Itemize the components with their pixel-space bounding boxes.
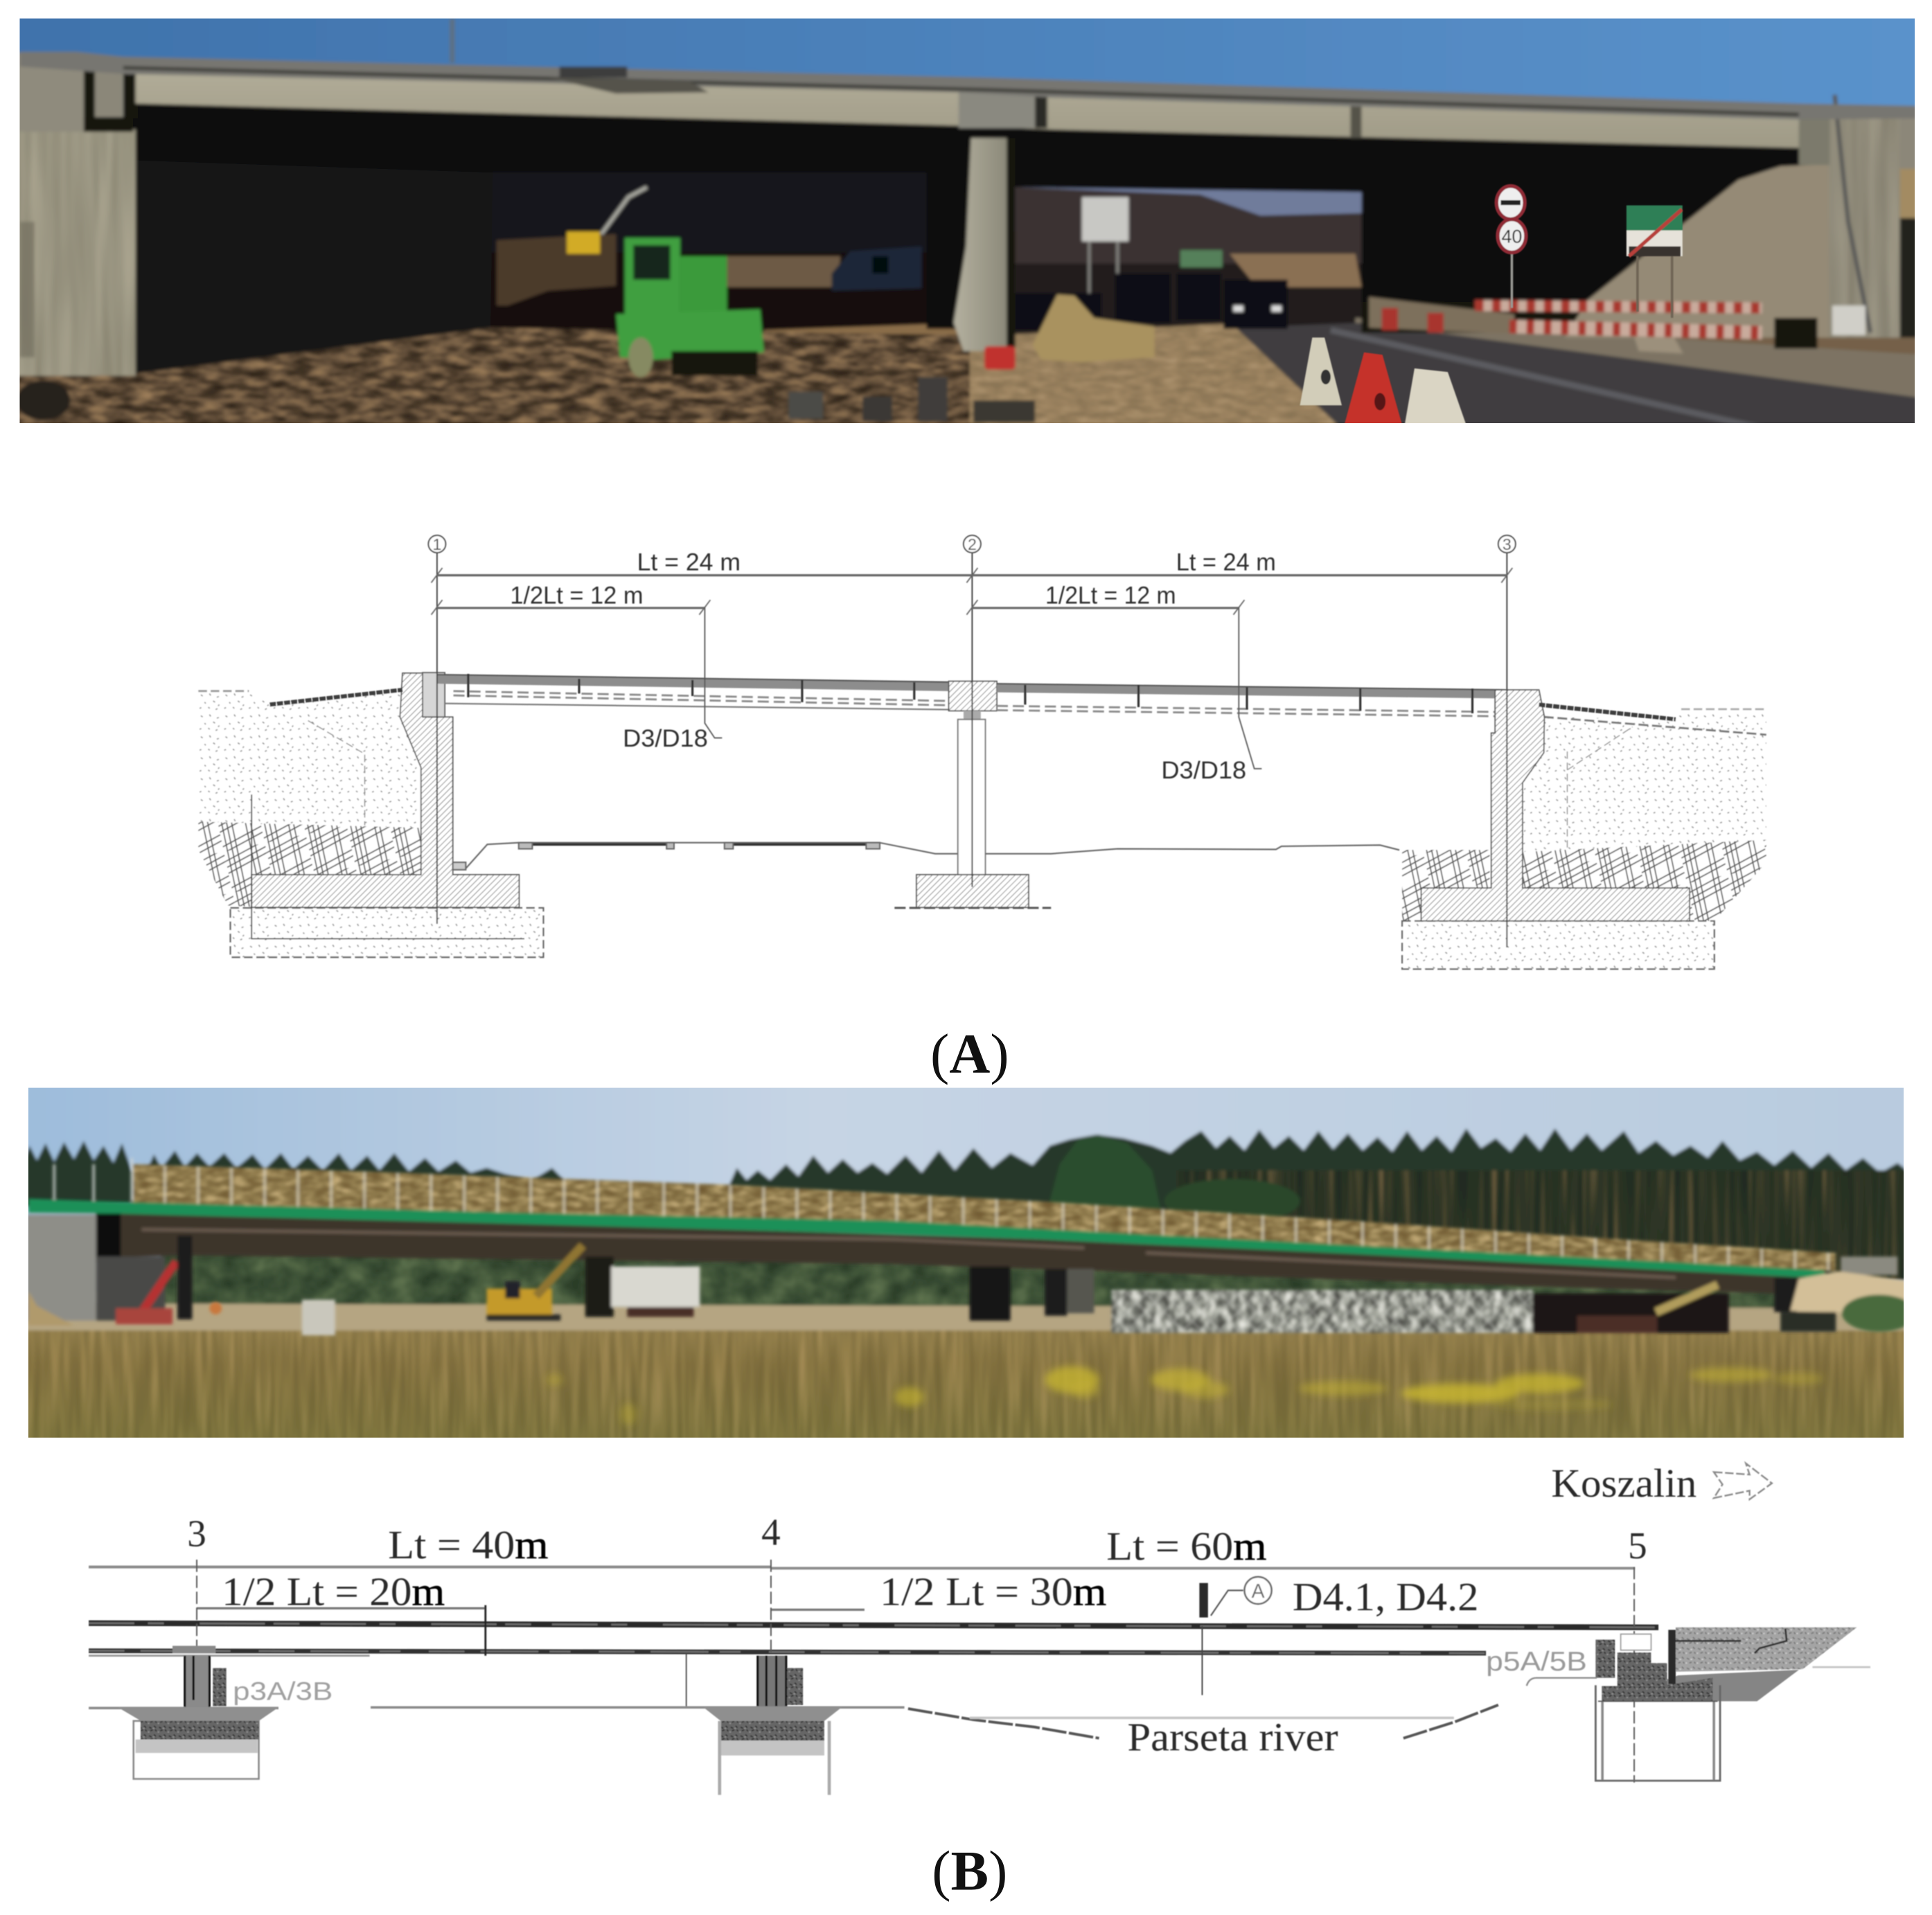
excavator <box>487 1245 583 1321</box>
dark underline of barrier <box>123 68 1799 114</box>
small red cone <box>984 346 1016 370</box>
central pier column <box>927 138 1016 351</box>
opening background right <box>1011 182 1374 335</box>
label p3A/3B: p3A/3B <box>233 1677 333 1706</box>
dimension label: 1/2 Lt = 30m: 1/2 Lt = 30 m <box>880 1569 1106 1614</box>
underside of deck <box>123 101 1805 192</box>
half span dimension lines <box>197 1605 865 1656</box>
round tree <box>1045 1134 1164 1226</box>
sensor marker: A <box>1252 1580 1265 1603</box>
sensor leader left <box>704 607 722 738</box>
left abutment <box>22 1213 165 1326</box>
abutment 5 <box>1527 1628 1870 1701</box>
red telehandler <box>116 1236 222 1324</box>
white small machines <box>302 1300 335 1335</box>
left soil crosshatch <box>198 821 421 907</box>
left abutment shaded wall <box>130 145 493 375</box>
van <box>832 247 921 291</box>
excavator <box>567 187 647 253</box>
background trees under deck <box>160 1250 1799 1312</box>
pylon <box>450 19 454 63</box>
right lean concrete <box>1402 921 1714 969</box>
dimension label: half span 1: 1/2Lt = 12 m <box>510 582 643 609</box>
rubble <box>16 377 1035 422</box>
pier 3 <box>172 1646 227 1710</box>
dimension label: Lt = 60m: Lt = 60 m <box>1106 1524 1267 1569</box>
vertical support line <box>686 1653 687 1707</box>
left reference rule <box>251 794 524 938</box>
dimension label: 1/2 Lt = 20m: 1/2 Lt = 20 m <box>222 1569 445 1614</box>
left embankment fill <box>198 691 421 828</box>
green deck edge <box>28 1199 1829 1279</box>
elevation drawing of bridge A <box>198 535 1766 969</box>
axis 3 <box>1498 535 1516 947</box>
direction label: Koszalin <box>1551 1461 1696 1506</box>
river banks and water line <box>908 1705 1498 1738</box>
dimension label: span 2: Lt = 24 m <box>1176 549 1276 576</box>
ground line left <box>89 1707 905 1709</box>
opening background left <box>488 169 957 336</box>
trunks <box>1177 1170 1916 1281</box>
green direction sign <box>1627 206 1683 318</box>
ground left of pillar <box>12 328 973 425</box>
speed limit signs: 40 <box>1502 226 1522 247</box>
traffic cones <box>1300 337 1466 425</box>
panel: photograph of bridge B <box>22 1082 1922 1444</box>
panel: photograph of bridge A <box>12 12 1924 431</box>
left approach slab <box>270 690 402 704</box>
axis 2: 2 <box>968 535 977 553</box>
right soil crosshatch <box>1402 840 1766 921</box>
main girder <box>96 1212 1823 1294</box>
meadow <box>22 1330 1913 1444</box>
beam joint and central block <box>959 89 1361 138</box>
meadow streaks <box>22 1330 1913 1444</box>
left end block <box>423 673 445 717</box>
axis number 4: 4 <box>761 1511 781 1553</box>
sensor label: D4.1, D4.2 <box>1293 1574 1478 1619</box>
straw bales <box>1033 294 1155 362</box>
end posts <box>54 1158 132 1201</box>
dimension lines with ticks <box>432 568 1512 615</box>
bottom deck line <box>89 1650 1486 1656</box>
axis number 3: 3 <box>187 1512 206 1554</box>
pile cap outline 5 <box>1595 1685 1720 1781</box>
caption B: (B) <box>932 1840 1007 1903</box>
axis 1 <box>428 535 445 924</box>
sensor marker <box>1199 1577 1272 1695</box>
machinery at right <box>1533 1278 1796 1333</box>
left deck span <box>437 674 949 710</box>
concrete blocks and barriers <box>1369 297 1865 353</box>
dimension label: Lt = 40m: Lt = 40 m <box>388 1522 549 1567</box>
right abutment section <box>1421 690 1690 921</box>
right embankment fill <box>1523 709 1766 852</box>
axis 1: 1 <box>432 535 441 553</box>
right approach slab <box>1539 704 1676 720</box>
sand heap and building <box>1780 1256 1916 1332</box>
axis lines <box>197 1560 1634 1783</box>
sensor leader right <box>1239 607 1261 769</box>
road sign panel <box>1082 197 1128 303</box>
ground line and road slabs <box>453 843 1399 870</box>
left abutment section <box>251 673 519 907</box>
central pier block, column, footing <box>894 682 1051 908</box>
right deck span <box>997 684 1506 716</box>
yellow flowers <box>546 1366 1823 1425</box>
drainage box on deck <box>549 66 709 93</box>
scaffolding <box>1111 1290 1533 1333</box>
caption A: (A) <box>930 1022 1009 1085</box>
dimension label: span 1: Lt = 24 m <box>637 549 741 576</box>
speed limit signs <box>1496 186 1526 308</box>
dimension label: half span 2: 1/2Lt = 12 m <box>1045 582 1176 609</box>
left lean concrete <box>231 908 543 957</box>
foundation 4 <box>704 1707 842 1795</box>
axis 3: 3 <box>1503 535 1512 553</box>
axis number 5: 5 <box>1628 1524 1647 1567</box>
span dimension line <box>89 1567 1635 1568</box>
foundation 3 <box>118 1707 278 1779</box>
green machine <box>616 238 764 377</box>
deck edge barrier <box>19 52 1922 120</box>
left abutment lit face <box>12 53 138 376</box>
photo base <box>19 170 1915 423</box>
ground strip <box>22 1303 1922 1343</box>
arrow: towards Koszalin <box>1714 1463 1772 1499</box>
pier under deck <box>585 1256 614 1317</box>
roadside strip <box>1356 318 1922 402</box>
river label: Parseta river <box>1128 1715 1338 1760</box>
sky <box>22 1082 1913 1291</box>
dark gap behind right beam end <box>1773 150 1804 169</box>
sensor label left: D3/D18 <box>623 724 708 752</box>
elevation drawing of bridge B <box>89 1461 1870 1795</box>
concrete beam <box>136 74 1799 148</box>
dump truck <box>611 1267 700 1317</box>
axis 2 <box>964 535 981 887</box>
ground right of pillar <box>970 323 1356 425</box>
top deck line <box>89 1623 1658 1628</box>
sky <box>12 12 1922 172</box>
sound barrier fence <box>133 1164 1836 1272</box>
right abutment <box>1361 95 1924 337</box>
cars <box>1016 274 1288 330</box>
central piers <box>970 1267 1094 1321</box>
forest <box>22 1128 1916 1281</box>
label p5A/5B: p5A/5B <box>1486 1647 1587 1677</box>
girder stripes <box>142 1229 1676 1278</box>
red and white barriers <box>1475 305 1762 332</box>
pier 4 <box>756 1656 803 1707</box>
sensor label right: D3/D18 <box>1161 756 1246 784</box>
road <box>1236 323 1922 431</box>
